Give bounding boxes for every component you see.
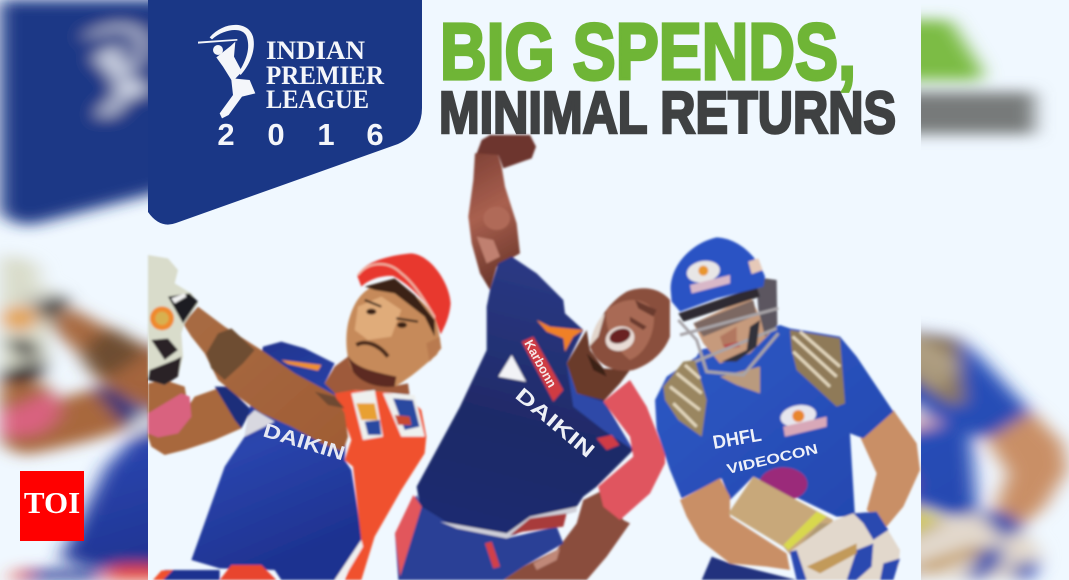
jersey text: left player: DAIKIN bbox=[261, 420, 347, 465]
logo year: 0 bbox=[267, 117, 285, 152]
jersey text: right player bbox=[711, 425, 819, 477]
title: BIG SPENDS, bbox=[440, 7, 856, 96]
logo year: 6 bbox=[366, 117, 384, 152]
logo wordmark: LEAGUE bbox=[266, 85, 369, 114]
title bbox=[439, 7, 896, 146]
jersey text: centre player bbox=[511, 337, 598, 463]
TOI badge bbox=[20, 471, 84, 541]
logo wordmark bbox=[266, 36, 384, 114]
icon: IPL batsman logo bbox=[198, 25, 255, 118]
logo year: 1 bbox=[317, 117, 335, 152]
jersey text: centre player: Karbonn bbox=[521, 337, 560, 390]
jersey text: right player: DHFL bbox=[711, 425, 763, 454]
logo year bbox=[217, 117, 384, 152]
jersey text: right player: VIDEOCON bbox=[725, 440, 819, 477]
logo wordmark: INDIAN bbox=[266, 36, 365, 65]
logo wordmark: PREMIER bbox=[266, 61, 384, 90]
player illustrations bbox=[148, 135, 920, 580]
TOI badge: TOI bbox=[24, 485, 80, 520]
panel: IPL logo badge bbox=[148, 0, 422, 225]
logo year: 2 bbox=[217, 117, 235, 152]
jersey text: centre player: DAIKIN bbox=[511, 384, 598, 463]
main panel bbox=[148, 0, 921, 580]
title: MINIMAL RETURNS bbox=[439, 80, 896, 146]
